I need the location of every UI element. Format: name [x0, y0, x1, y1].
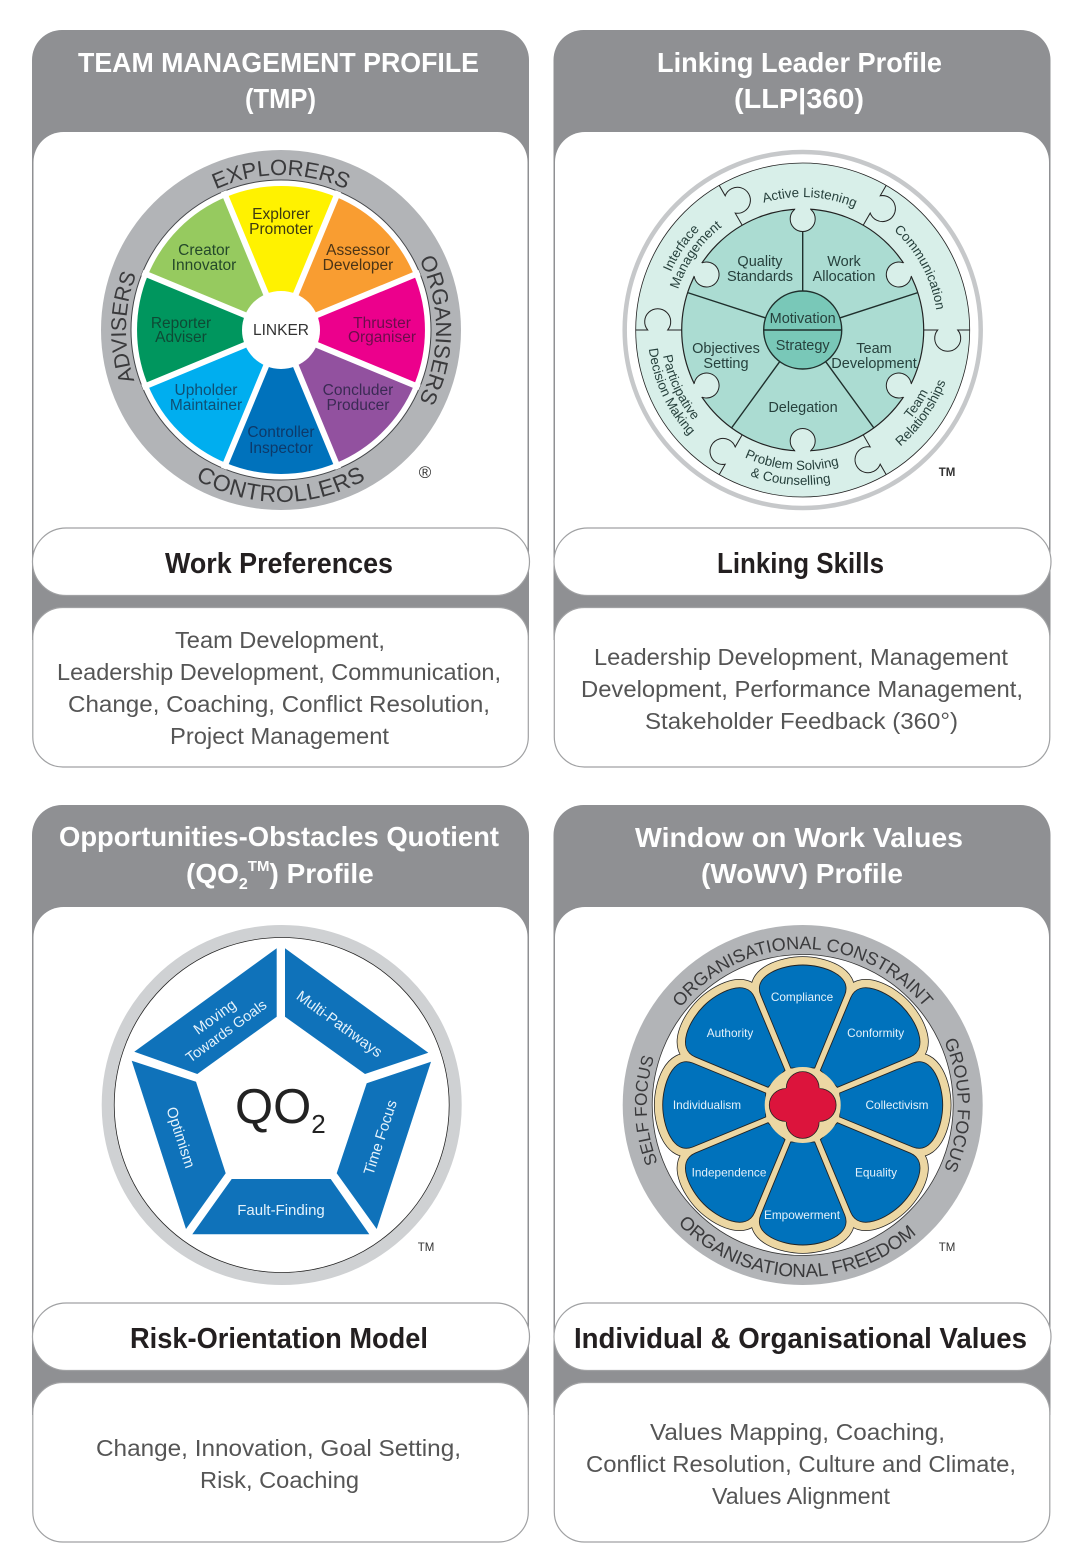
pill: risk-orientation model: Risk-Orientation Model [130, 1323, 428, 1355]
QO2 logo text: 2 [311, 1109, 326, 1139]
segment labels: Moving [190, 996, 240, 1038]
petal labels: Compliance [771, 990, 834, 1004]
pill: linking skills: Linking Skills [717, 548, 884, 580]
petal labels: Independence [692, 1166, 767, 1180]
inner labels: Objectives [692, 341, 760, 357]
text: applications: Project Management [170, 723, 390, 749]
ring labels: GROUP FOCUS [945, 1038, 970, 1172]
inner labels: Team [856, 341, 892, 357]
ring labels: ORGANISATIONAL FREEDOM [680, 1217, 916, 1278]
petal outlines [663, 965, 943, 1245]
segment labels [162, 988, 401, 1219]
inner labels [692, 254, 917, 416]
pill: individual and organisational values: Individual & Organisational Values [574, 1323, 1027, 1355]
text: applications: Development, Performance Management, [581, 676, 1023, 702]
segment labels: Developer [323, 257, 393, 274]
panel background [32, 30, 530, 767]
heading: window on work values: (WoWV) Profile [701, 858, 903, 889]
text: applications: Change, Coaching, Conflict Resolution, [68, 691, 490, 717]
outer ring labels [648, 188, 945, 486]
panel: window on work values [553, 805, 1052, 1543]
segment labels: Optimism [162, 1105, 198, 1170]
outer ring seams [636, 175, 970, 485]
hub: motivation and strategy [764, 291, 842, 369]
outer ring labels: Participative [663, 354, 698, 420]
segment labels: Organiser [348, 329, 416, 346]
panel background [32, 805, 530, 1542]
petal labels [673, 990, 929, 1222]
heading: QO2 profile: (QO [186, 858, 239, 889]
trademark: TM [939, 1242, 955, 1254]
segment labels: Upholder [175, 382, 237, 399]
segment labels: Explorer [252, 206, 310, 223]
QO2 logo text: QO [235, 1080, 311, 1134]
segment labels: Fault-Finding [237, 1202, 325, 1219]
text: applications: Values Mapping, Coaching, [650, 1419, 945, 1445]
coloured wheel segments [137, 186, 425, 474]
text: applications: Values Alignment [712, 1483, 891, 1509]
inner labels: Motivation [770, 311, 836, 327]
text: applications [57, 627, 501, 749]
ring labels: SELF FOCUS [634, 1056, 656, 1165]
petal labels: Collectivism [866, 1098, 929, 1112]
segment labels: Towards Goals [183, 997, 270, 1066]
outer ring labels: Active Listening [764, 188, 857, 209]
outer ring labels: Relationships [895, 380, 945, 446]
segment labels: Innovator [172, 257, 236, 274]
outer ring labels: & Counselling [751, 468, 830, 486]
text: applications: Leadership Development, Communication, [57, 659, 501, 685]
panel: team management profile [32, 30, 530, 768]
inner labels: Strategy [776, 338, 830, 354]
pill: work preferences: Work Preferences [165, 548, 393, 580]
segment labels: Producer [327, 397, 389, 414]
pentagon segments [132, 948, 431, 1234]
panel background [554, 30, 1051, 767]
text: applications: Change, Innovation, Goal Setting, [96, 1435, 461, 1461]
centre hub and red quatrefoil [765, 1067, 841, 1143]
ring labels [111, 160, 452, 502]
segment labels [151, 206, 416, 457]
heading: window on work values: Window on Work Values [635, 822, 963, 853]
segment labels: Creator [178, 242, 230, 259]
outer ring labels: Management [670, 221, 722, 288]
inner labels: Delegation [768, 400, 838, 416]
registered mark: ® [419, 463, 432, 482]
petal labels: Individualism [673, 1098, 741, 1112]
text: applications [586, 1419, 1016, 1509]
inner labels: Development [831, 356, 917, 372]
wheel: QO2 pentagon [108, 931, 456, 1279]
petal gold frames [663, 965, 943, 1245]
segment labels: Reporter [151, 315, 211, 332]
segment labels: Adviser [155, 329, 207, 346]
segment labels: Promoter [249, 221, 313, 238]
text: applications: Conflict Resolution, Culture and Climate, [586, 1451, 1016, 1477]
heading: QO2 profile: ) Profile [269, 858, 374, 889]
text: applications: Stakeholder Feedback (360°) [645, 708, 958, 734]
heading: QO2 profile: Opportunities-Obstacles Quotient [59, 821, 499, 852]
inner labels: Work [827, 254, 862, 270]
heading: QO2 profile: TM [248, 858, 269, 875]
segment labels: Multi-Pathways [293, 988, 385, 1061]
panel: opportunities-obstacles quotient [32, 805, 530, 1542]
spokes [688, 225, 918, 428]
ring labels: ORGANISATIONAL CONSTRAINT [674, 936, 934, 1005]
heading: team management profile [78, 47, 479, 114]
heading: linking leader profile: Linking Leader Profile [657, 47, 942, 78]
heading: linking leader profile [657, 47, 942, 114]
outer ring labels: Team [904, 390, 928, 417]
segment labels: Controller [247, 424, 315, 441]
segment labels: Concluder [323, 382, 393, 399]
segment labels: LINKER [253, 322, 309, 339]
heading: QO2 profile: 2 [239, 876, 248, 893]
inner labels: Quality [737, 254, 783, 270]
segment labels: Thruster [353, 315, 411, 332]
inner puzzle knobs [688, 205, 917, 455]
text: applications [96, 1435, 461, 1493]
text: applications: Team Development, [175, 627, 385, 653]
segment labels: Assessor [326, 242, 390, 259]
text: applications: Leadership Development, Management [594, 644, 1009, 670]
petal labels: Equality [855, 1166, 897, 1180]
ring labels: ADVISERS [111, 272, 135, 381]
wheel: team management colours [101, 150, 461, 510]
text: applications [581, 644, 1023, 734]
heading: team management profile: (TMP) [245, 83, 316, 114]
inner labels: Standards [727, 269, 793, 285]
heading: team management profile: TEAM MANAGEMENT PROFILE [78, 47, 479, 78]
wheel: linking skills puzzle [622, 150, 983, 510]
segment labels: Maintainer [170, 397, 242, 414]
wheel: work values flower [622, 925, 983, 1285]
blue petals [663, 965, 943, 1245]
segment labels: Time Focus [361, 1098, 401, 1177]
heading: linking leader profile: (LLP|360) [734, 83, 864, 114]
petal labels: Conformity [847, 1026, 904, 1040]
segment labels: Inspector [249, 440, 313, 457]
petal labels: Empowerment [764, 1208, 841, 1222]
trademark: TM [418, 1242, 434, 1254]
panel: linking leader profile [553, 30, 1052, 768]
outer ring labels: Decision Making [648, 348, 694, 436]
outer ring labels: Interface [663, 226, 698, 271]
inner labels: Setting [703, 356, 749, 372]
inner labels: Allocation [813, 269, 875, 285]
trademark: TM [939, 467, 955, 479]
ring labels [634, 936, 970, 1278]
heading: QO2 profile [59, 821, 499, 893]
ring labels: EXPLORERS [212, 160, 350, 188]
text: applications: Risk, Coaching [200, 1467, 359, 1493]
heading: window on work values [635, 822, 963, 889]
panel background [554, 805, 1051, 1542]
ring labels: ORGANISERS [420, 256, 452, 404]
ring labels: CONTROLLERS [198, 468, 364, 502]
petal labels: Authority [707, 1026, 753, 1040]
outer ring labels: Problem Solving [746, 449, 838, 470]
outer ring labels: Communication [896, 226, 943, 310]
